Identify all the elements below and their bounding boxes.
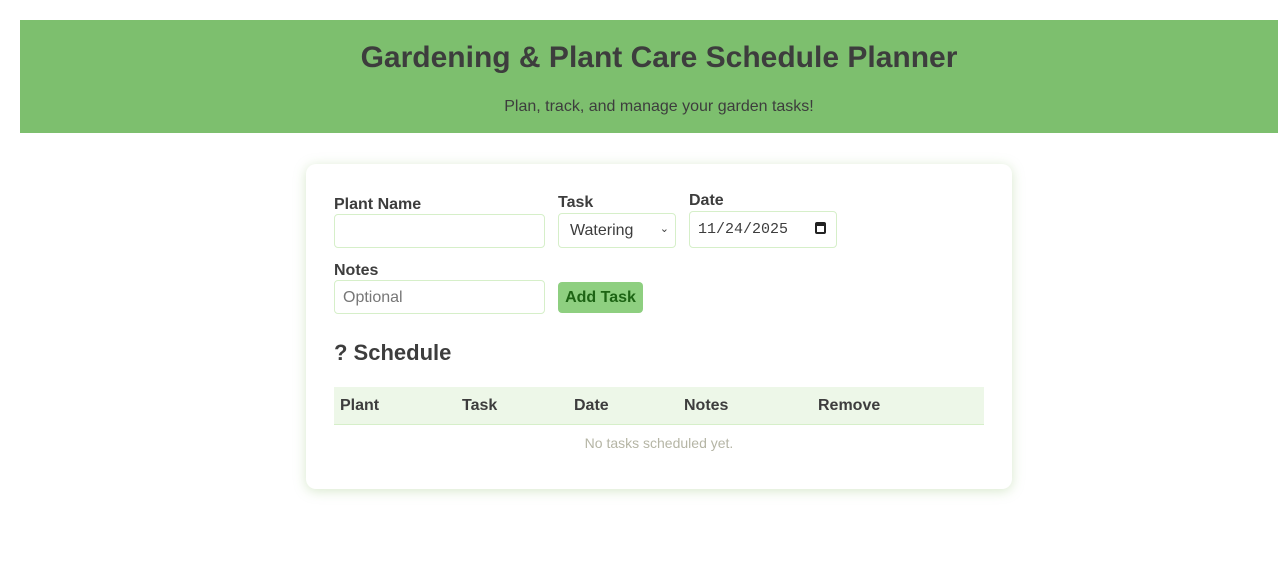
table header: Date — [574, 397, 609, 414]
form: notes — [334, 262, 545, 314]
form: task select: Task — [558, 194, 593, 211]
table: schedule — [334, 387, 984, 451]
panel: planner card — [306, 164, 1012, 489]
form: task select — [558, 194, 676, 248]
title: Gardening & Plant Care Schedule Planner — [361, 41, 957, 74]
form: plant name: Plant Name — [334, 196, 421, 213]
form: task select: Watering — [570, 222, 633, 239]
form: date — [689, 192, 837, 248]
button: add task — [558, 282, 643, 313]
button: add task: Add Task — [565, 289, 636, 306]
subtitle: Plan, track, and manage your garden tasks! — [504, 98, 814, 115]
table header: Notes — [684, 397, 728, 414]
table header: Plant — [340, 397, 379, 414]
table header: Task — [462, 397, 497, 414]
form: plant name — [334, 196, 545, 248]
form: date: 11/24/2025 — [698, 221, 788, 238]
empty message: No tasks scheduled yet. — [585, 435, 733, 451]
form: notes: Notes — [334, 262, 378, 279]
table header: Remove — [818, 397, 880, 414]
heading: schedule: ? Schedule — [334, 340, 451, 365]
form: task select: ⌄ — [660, 223, 669, 235]
table header — [334, 387, 984, 425]
header banner — [20, 20, 1278, 133]
form: date: Date — [689, 192, 724, 209]
form: notes: Optional — [343, 289, 403, 306]
